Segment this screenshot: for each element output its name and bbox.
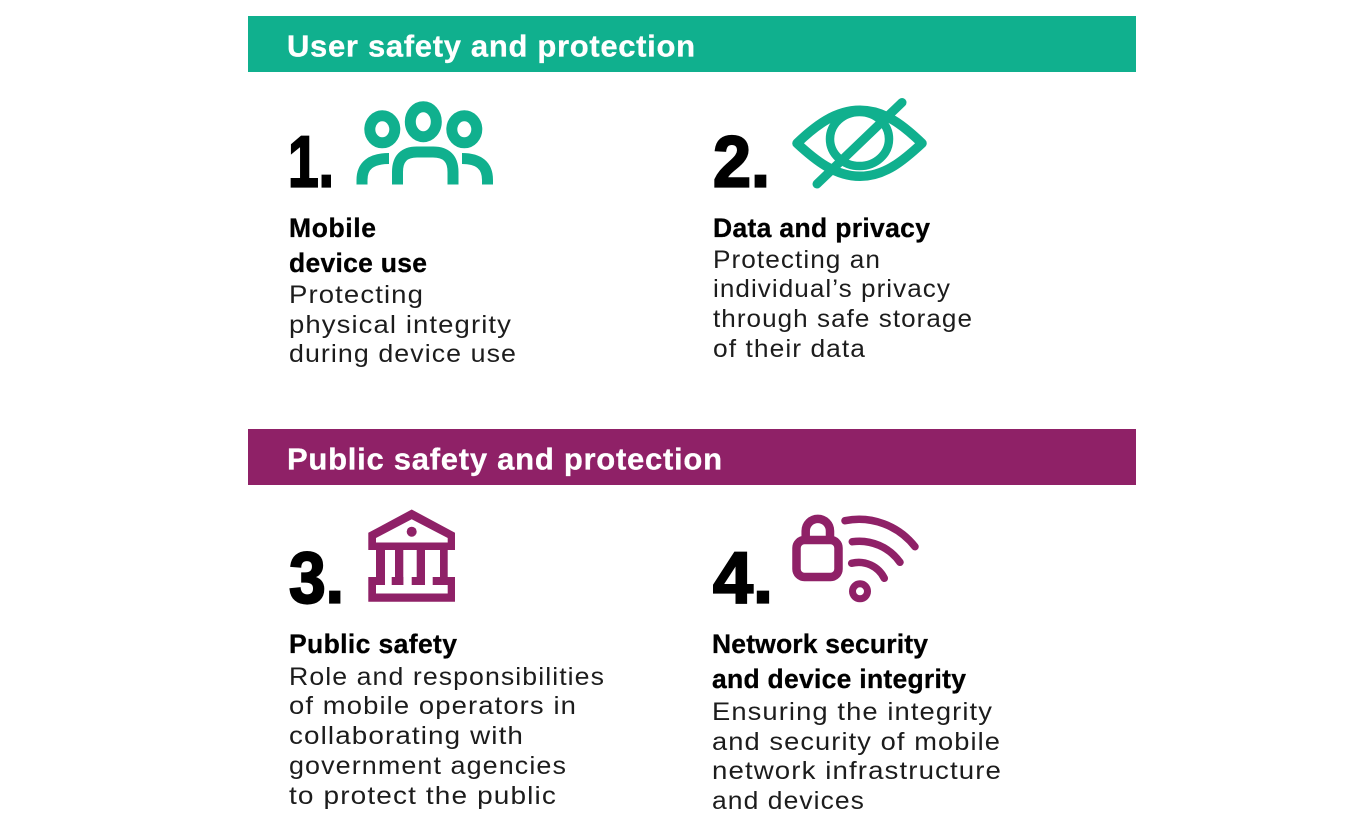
icon: government building <box>368 510 455 602</box>
heading: network security and device integrity <box>712 629 966 694</box>
text: mobile device use description: physical integrity <box>289 311 512 339</box>
heading: mobile device use: Mobile <box>289 213 376 243</box>
heading: mobile device use <box>289 213 427 278</box>
text: public safety description <box>289 663 605 810</box>
text: public safety description: government agencies <box>289 752 567 780</box>
text: data and privacy description: Protecting an <box>713 246 881 274</box>
text: network security description: Ensuring the integrity <box>712 698 993 726</box>
text: public safety description: to protect the public <box>289 782 557 810</box>
text: network security description: network infrastructure <box>712 757 1002 785</box>
icon: group of people <box>362 107 488 184</box>
text: data and privacy description: through safe storage <box>713 305 973 333</box>
text: public safety description: collaborating with <box>289 722 524 750</box>
panel: 4 network security <box>712 519 1002 815</box>
panel: 1 mobile device use <box>288 107 517 368</box>
icon: crossed-out eye <box>797 102 922 184</box>
section header: public safety <box>248 429 1136 485</box>
text: data and privacy description: of their data <box>713 335 866 363</box>
text: mobile device use description: during device use <box>289 340 517 368</box>
panel: 3 public safety <box>289 510 605 810</box>
text: data and privacy description: individual’s privacy <box>713 275 951 303</box>
heading: data and privacy: Data and privacy <box>713 213 930 243</box>
section header: public safety: Public safety and protection <box>287 442 722 477</box>
text: mobile device use description <box>289 281 517 368</box>
panel: 2 data and privacy <box>713 102 973 363</box>
text: mobile device use description: Protecting <box>289 281 424 309</box>
text: network security description <box>712 698 1002 815</box>
number 3: 3. <box>289 538 344 618</box>
text: data and privacy description <box>713 246 973 363</box>
text: public safety description: of mobile operators in <box>289 692 577 720</box>
heading: network security and device integrity: Network security <box>712 629 928 659</box>
text: public safety description: Role and responsibilities <box>289 663 605 691</box>
icon: padlock and wifi <box>796 519 915 599</box>
text: network security description: and security of mobile <box>712 728 1001 756</box>
heading: network security and device integrity: and device integrity <box>712 664 966 694</box>
section header: user safety <box>248 16 1136 72</box>
number 1: 1. <box>288 122 334 202</box>
number 4: 4. <box>713 538 773 618</box>
heading: mobile device use: device use <box>289 248 427 278</box>
text: network security description: and devices <box>712 787 865 815</box>
number 2: 2. <box>713 122 770 202</box>
heading: public safety: Public safety <box>289 629 457 659</box>
section header: user safety: User safety and protection <box>287 29 695 64</box>
